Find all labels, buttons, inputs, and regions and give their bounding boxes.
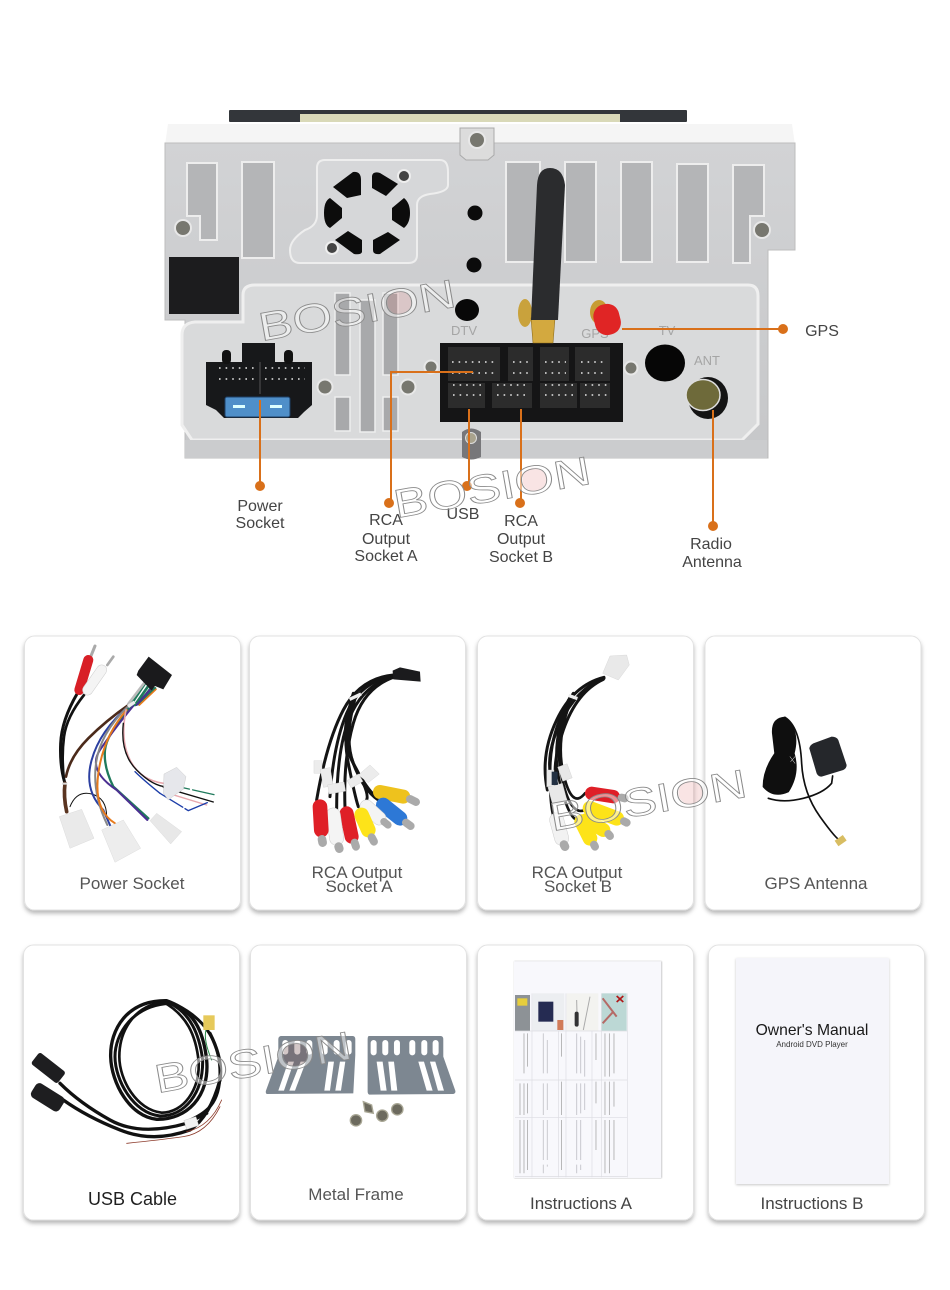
caption: Socket B: [544, 877, 612, 896]
label: GPS: GPS: [805, 323, 839, 340]
panel: Power Socket: [24, 636, 240, 910]
GPS red plug: [590, 300, 623, 338]
leaflet table grid: [515, 993, 627, 1177]
panel: RCA Output Socket B: [478, 636, 694, 910]
lower recessed panel: [182, 285, 758, 440]
panel screws: [318, 360, 638, 394]
card background: [24, 636, 240, 910]
label: Radio Antenna: Radio: [690, 536, 732, 553]
caption: Instructions A: [530, 1194, 633, 1213]
power harness illustration: [59, 646, 214, 862]
label: RCA Output Socket B: RCA: [504, 513, 538, 530]
panel printed labels: DTV: [451, 323, 477, 338]
label: RCA Output Socket A: RCA: [369, 512, 403, 529]
top screw tab: [460, 128, 494, 160]
label: Power Socket: Socket: [236, 515, 285, 532]
label: RCA Output Socket A: Socket A: [354, 548, 418, 565]
device rear panel photo: [165, 110, 795, 531]
black side block: [169, 257, 239, 314]
upper ventilation slots: [187, 162, 764, 263]
multi socket connector block: [440, 343, 623, 422]
caption: Metal Frame: [308, 1185, 404, 1204]
panel: RCA Output Socket A: [250, 636, 466, 910]
card background: [478, 945, 694, 1220]
label: Radio Antenna: Antenna: [682, 554, 742, 571]
side screws: [175, 220, 770, 238]
instruction leaflet illustration: [514, 961, 661, 1178]
top screen edge: [229, 110, 687, 122]
label: RCA Output Socket A: Output: [362, 531, 411, 548]
owner's manual illustration: [736, 958, 889, 1184]
panel: Metal Frame: [250, 945, 466, 1220]
label: Power Socket: Power: [237, 498, 283, 515]
fan recess with holes: [290, 160, 448, 263]
panel printed labels: ANT: [694, 353, 720, 368]
ANT radio socket: [686, 377, 728, 419]
TV hole: [645, 344, 685, 382]
label: RCA Output Socket B: Socket B: [489, 549, 553, 566]
card background: [250, 636, 466, 910]
panel: Instructions B: [708, 945, 924, 1220]
leaflet picture row: [515, 993, 627, 1031]
top white casing: [165, 124, 795, 145]
metal frame brackets illustration: [266, 1036, 455, 1126]
watermark: cards row one: BOSION: [546, 760, 750, 840]
caption: Socket A: [325, 877, 393, 896]
panel bottom rim: [185, 440, 767, 458]
caption: RCA Output: [532, 863, 623, 882]
GPS antenna illustration: [763, 717, 847, 846]
panel printed labels: [451, 323, 720, 368]
panel printed labels: TV: [659, 323, 676, 338]
card background: [478, 636, 694, 910]
label: USB: USB: [447, 506, 479, 523]
mounting holes: [466, 206, 482, 272]
orange leader lines: [255, 324, 788, 531]
panel printed labels: GPS: [581, 326, 609, 341]
caption: Power Socket: [80, 874, 185, 893]
leaflet page: [514, 961, 661, 1178]
caption: USB Cable: [88, 1189, 177, 1209]
right bracket: [368, 1036, 455, 1095]
caption: Instructions B: [760, 1194, 864, 1213]
card background: [24, 945, 240, 1220]
booklet page: [736, 958, 889, 1184]
manual title: Owner's Manual: [756, 1022, 868, 1039]
card background: [708, 945, 924, 1220]
watermark: cards row two: BOSION: [151, 1022, 355, 1102]
card background: [705, 636, 921, 910]
power connector: [206, 343, 312, 418]
card background: [250, 945, 466, 1220]
watermark: top: BOSION: [255, 270, 459, 350]
screws: [350, 1102, 403, 1126]
plugs: [320, 792, 416, 849]
leaflet text lines: [520, 1033, 614, 1173]
WiFi antenna: [518, 168, 565, 343]
manual subtitle: Android DVD Player: [776, 1040, 848, 1049]
RCA cable A illustration: [314, 667, 421, 849]
caption: RCA Output: [312, 863, 403, 882]
red and white RCA plugs: [79, 646, 113, 690]
RCA cable B illustration: [545, 655, 629, 847]
connector: [393, 667, 421, 682]
label: RCA Output Socket B: Output: [497, 531, 546, 548]
panel: USB Cable: [24, 945, 240, 1220]
bottom screw tab: [462, 428, 481, 460]
callout labels: [236, 323, 839, 571]
left bracket: [266, 1036, 355, 1094]
ventilation ribs: [335, 293, 398, 432]
panel: GPS Antenna: [705, 636, 921, 910]
panel: Instructions A: [478, 945, 694, 1220]
blue fuse: [225, 397, 290, 417]
USB cable illustration: [29, 1001, 222, 1143]
metal back plate: [165, 143, 795, 458]
DTV hole: [455, 299, 479, 321]
watermark: middle: BOSION: [390, 447, 594, 527]
caption: GPS Antenna: [764, 874, 868, 893]
